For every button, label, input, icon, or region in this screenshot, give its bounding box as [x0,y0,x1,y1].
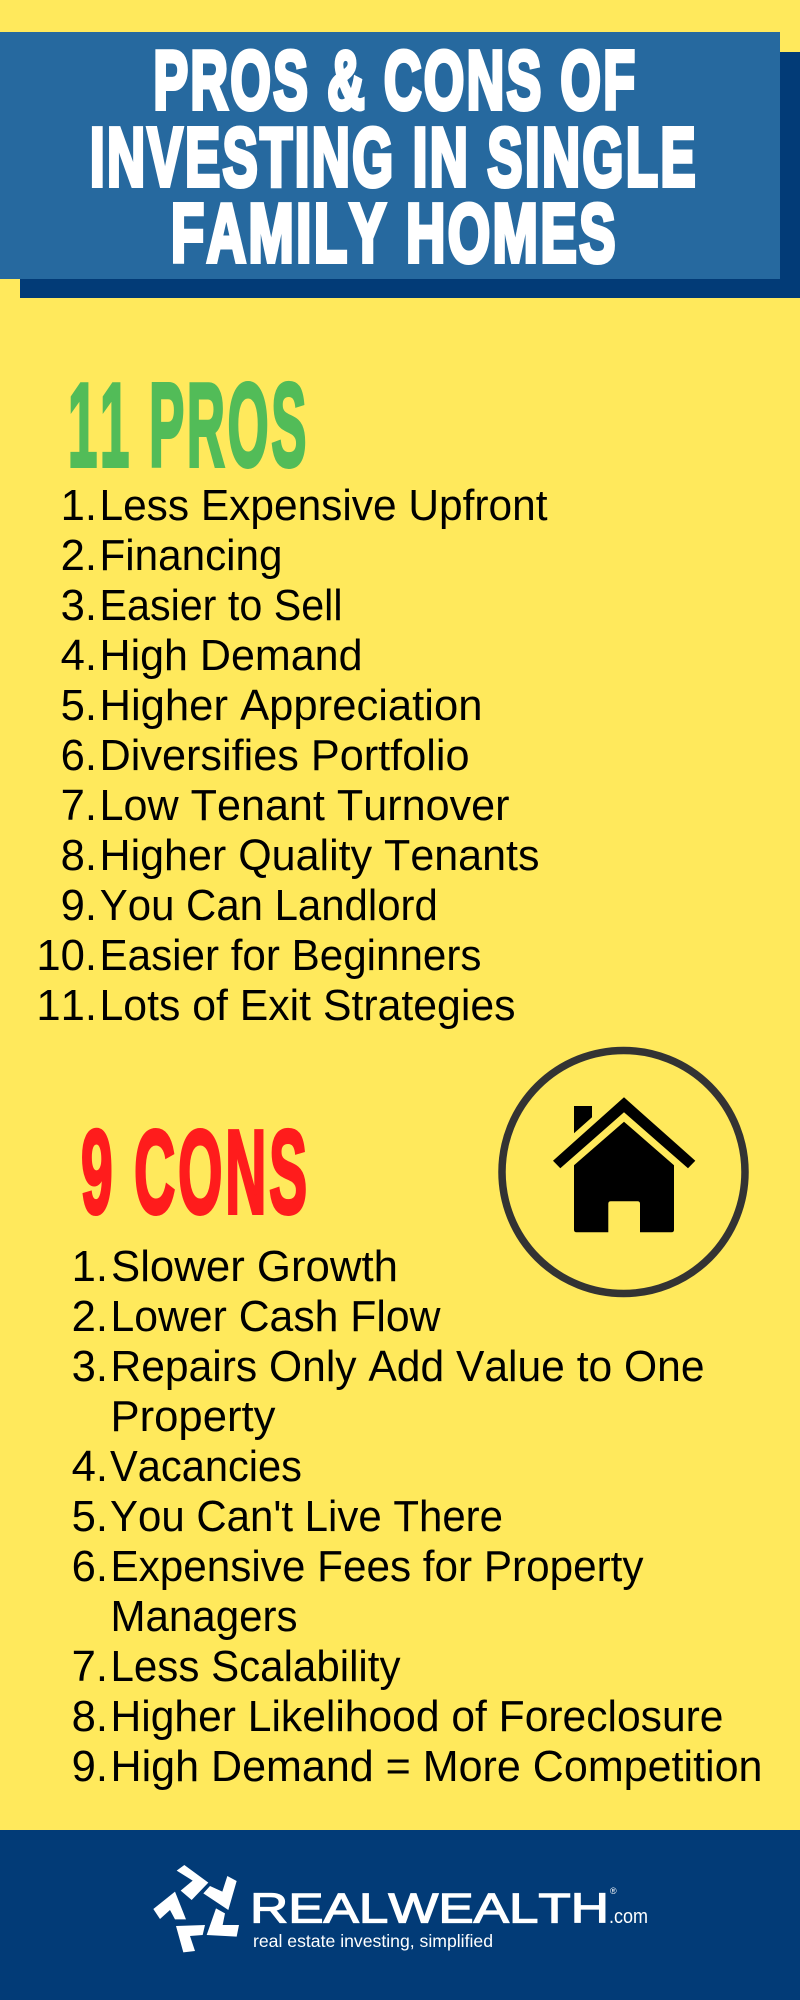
pro 1: Less Expensive Upfront [100,482,548,530]
con 7: Less Scalability [110,1643,401,1691]
con 3: Repairs Only Add Value to One [110,1343,704,1391]
footer band [0,1830,800,2000]
logo wordmark [250,1884,648,1951]
pro 3: 3. [61,582,97,630]
pro 4: High Demand [100,632,362,680]
title [90,34,698,280]
logo wordmark: REALWEALTH [250,1884,609,1931]
pro 10: Easier for Beginners [100,932,482,980]
pro 9: 9. [61,882,97,930]
con 3 [72,1343,704,1441]
con 7: 7. [72,1643,108,1691]
pro 8: Higher Quality Tenants [100,832,540,880]
title banner [0,32,800,298]
con 1: Slower Growth [111,1243,398,1291]
pro 2: 2. [61,532,97,580]
pros list [36,482,548,1030]
con 4: Vacancies [110,1443,302,1491]
con 8: 8. [72,1693,108,1741]
con 9: High Demand = More Competition [110,1743,762,1791]
icon: logo mark [153,1865,239,1952]
pro 6: 6. [61,732,97,780]
pro 7: 7. [61,782,97,830]
pro 5: Higher Appreciation [100,682,482,730]
pro 7: Low Tenant Turnover [100,782,510,830]
con 3: Property [110,1393,276,1441]
con 4: 4. [72,1443,108,1491]
banner panel [0,32,780,279]
logo wordmark: .com [609,1906,648,1928]
con 2: 2. [72,1293,108,1341]
con 6: Managers [110,1593,298,1641]
pro 8: 8. [61,832,97,880]
con 3: 3. [72,1343,108,1391]
pro 3: Easier to Sell [100,582,342,630]
cons list [72,1243,762,1791]
icon: house in circle [502,1050,745,1294]
text: 11 PROS [68,359,309,492]
pro 2: Financing [100,532,282,580]
pro 6: Diversifies Portfolio [100,732,470,780]
con 6 [72,1543,644,1641]
pro 4: 4. [61,632,97,680]
text: 9 CONS [81,1106,310,1239]
con 2: Lower Cash Flow [110,1293,441,1341]
logo wordmark: real estate investing, simplified [253,1931,493,1951]
logo wordmark: ® [610,1886,617,1896]
pro 11: Lots of Exit Strategies [100,982,516,1030]
pro 10: 10. [36,932,97,980]
con 5: You Can't Live There [110,1493,503,1541]
pro 11: 11. [36,982,97,1030]
con 1: 1. [72,1243,108,1291]
pro 1: 1. [61,482,97,530]
con 6: Expensive Fees for Property [110,1543,644,1591]
con 5: 5. [72,1493,108,1541]
pro 5: 5. [61,682,97,730]
pro 9: You Can Landlord [100,882,438,930]
banner shadow [20,52,800,298]
con 6: 6. [72,1543,108,1591]
con 9: 9. [72,1743,108,1791]
con 8: Higher Likelihood of Foreclosure [110,1693,724,1741]
